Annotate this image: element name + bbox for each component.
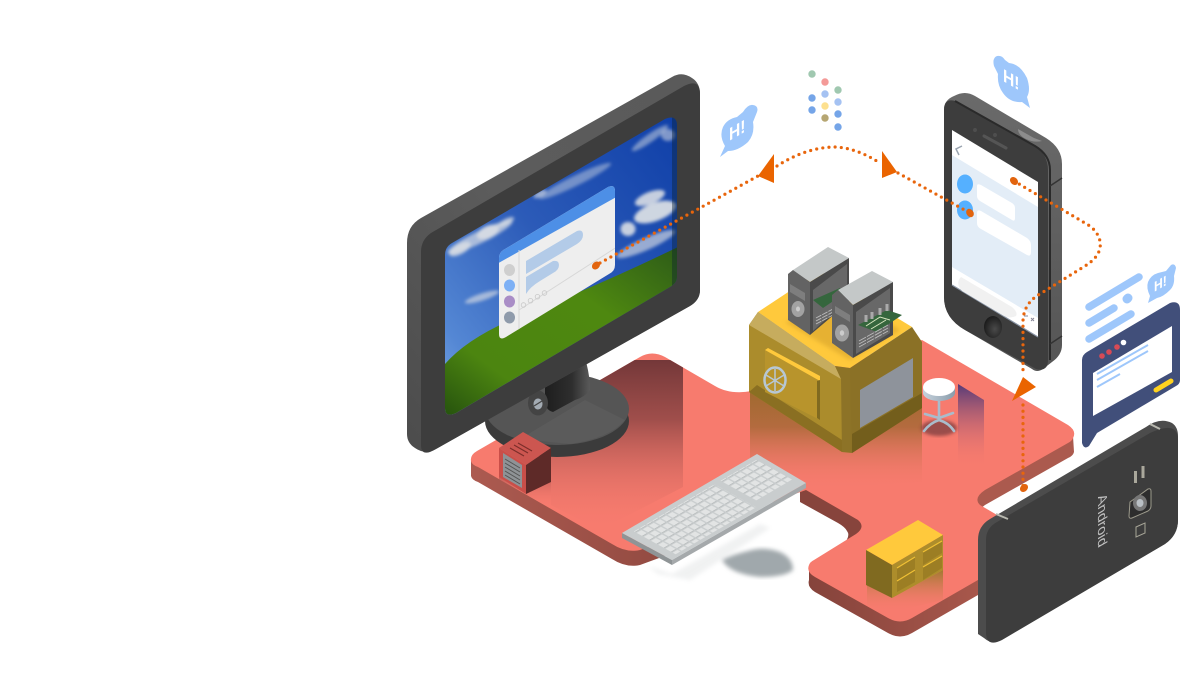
phone bubbles bbox=[977, 184, 1015, 221]
web card dots bbox=[1099, 353, 1105, 359]
chat avatars bbox=[504, 264, 515, 276]
safe right face bbox=[850, 327, 922, 453]
safe gray panel bbox=[860, 358, 913, 428]
monitor bbox=[407, 74, 700, 457]
monitor outer body bbox=[407, 74, 700, 452]
web card button bbox=[1156, 381, 1171, 390]
dotted route to phone bbox=[898, 173, 970, 213]
icon: Hi bubble left: H! bbox=[729, 116, 745, 145]
desk side: front-right piece bbox=[809, 540, 1004, 636]
text bars icon bbox=[1089, 277, 1139, 339]
monitor base bbox=[485, 373, 629, 457]
keyboard bbox=[622, 454, 806, 565]
red box bbox=[499, 432, 551, 494]
arrowhead left bbox=[758, 154, 774, 183]
shadow: monitor on desk bbox=[551, 360, 683, 496]
shadow: mouse blob bbox=[722, 549, 793, 577]
chat window on monitor bbox=[499, 186, 615, 338]
android edge bbox=[978, 421, 1178, 642]
smartphone (front) bbox=[944, 93, 1062, 371]
chat input dots bbox=[521, 291, 547, 307]
web card window bbox=[1093, 326, 1172, 416]
phone top button bbox=[1018, 129, 1042, 142]
dotted route over the top bbox=[777, 147, 880, 166]
safe corner chamfer bbox=[835, 366, 854, 453]
chat bubbles bbox=[526, 230, 583, 274]
desk top surface bbox=[471, 340, 1074, 622]
web card speech bubble bbox=[1082, 302, 1180, 447]
shadow: keyboard on floor bbox=[648, 524, 770, 580]
monitor hinge knob bbox=[528, 390, 548, 416]
android button bbox=[1136, 523, 1145, 537]
drawers bbox=[866, 520, 943, 598]
dotted route monitor to cloud bbox=[600, 176, 758, 263]
desk side: right edge bbox=[960, 436, 1074, 520]
shadow of servers on safe top bbox=[785, 300, 900, 360]
arrow: message flow bbox=[590, 147, 1100, 494]
chat header bbox=[499, 186, 615, 263]
dotted route phone to android bbox=[1014, 181, 1100, 487]
circuit board bbox=[858, 310, 902, 332]
android back bbox=[986, 428, 1178, 643]
monitor neck bbox=[545, 358, 590, 412]
stool bbox=[923, 378, 955, 431]
safe door bbox=[765, 350, 820, 420]
desk side: left piece bbox=[471, 440, 700, 566]
servers bbox=[788, 247, 902, 358]
shadow: drawers bbox=[867, 570, 943, 612]
panel: desk platform bbox=[471, 340, 1074, 636]
icon: Hi bubble right bbox=[1147, 264, 1176, 303]
server 1 bbox=[788, 247, 849, 335]
icon: Hi bubble right: H! bbox=[1154, 272, 1167, 295]
android label: Android bbox=[1095, 490, 1109, 551]
web card lines bbox=[1097, 345, 1148, 387]
icon: Hi bubble top: H! bbox=[1003, 65, 1019, 94]
desk side: keyboard notch bbox=[800, 486, 872, 552]
endpoint dots bbox=[590, 260, 602, 271]
phone speaker and camera bbox=[984, 136, 1006, 148]
safe bbox=[749, 271, 922, 453]
android phone bbox=[978, 421, 1178, 643]
shadow: red box on desk bbox=[499, 477, 551, 495]
phone avatars bbox=[957, 174, 973, 194]
phone chat area bbox=[952, 155, 1038, 318]
shadow: safe on desk bbox=[750, 392, 922, 468]
arrowhead right bbox=[882, 151, 897, 178]
phone front bbox=[944, 100, 1048, 370]
phone input bbox=[958, 277, 1016, 318]
hill bbox=[445, 246, 680, 420]
safe left face bbox=[749, 312, 842, 452]
screen right shade bbox=[672, 118, 677, 286]
icon: Hi bubble top bbox=[993, 56, 1030, 108]
shadow: stool bbox=[921, 420, 957, 436]
monitor front face bbox=[421, 83, 700, 453]
safe wheel bbox=[764, 368, 786, 392]
clouds bbox=[445, 122, 679, 306]
android highlights bbox=[996, 424, 1160, 519]
shadow: purple pillar bbox=[958, 384, 984, 468]
phone body edge bbox=[944, 93, 1062, 371]
icon: coloured dots bbox=[808, 70, 842, 131]
android camera bbox=[1129, 489, 1151, 518]
icon: Hi bubble left bbox=[720, 105, 758, 157]
phone screen bottom edge bbox=[952, 285, 1038, 337]
phone home button bbox=[984, 316, 1002, 338]
safe top bbox=[758, 271, 912, 368]
server 2 bbox=[832, 271, 902, 358]
phone screen bbox=[952, 130, 1038, 337]
phone back chevron bbox=[956, 146, 962, 155]
monitor screen wallpaper bbox=[445, 114, 680, 420]
phone dark rim bbox=[955, 101, 1050, 360]
android flash bbox=[1136, 466, 1143, 483]
arrowhead down bbox=[1012, 377, 1036, 401]
